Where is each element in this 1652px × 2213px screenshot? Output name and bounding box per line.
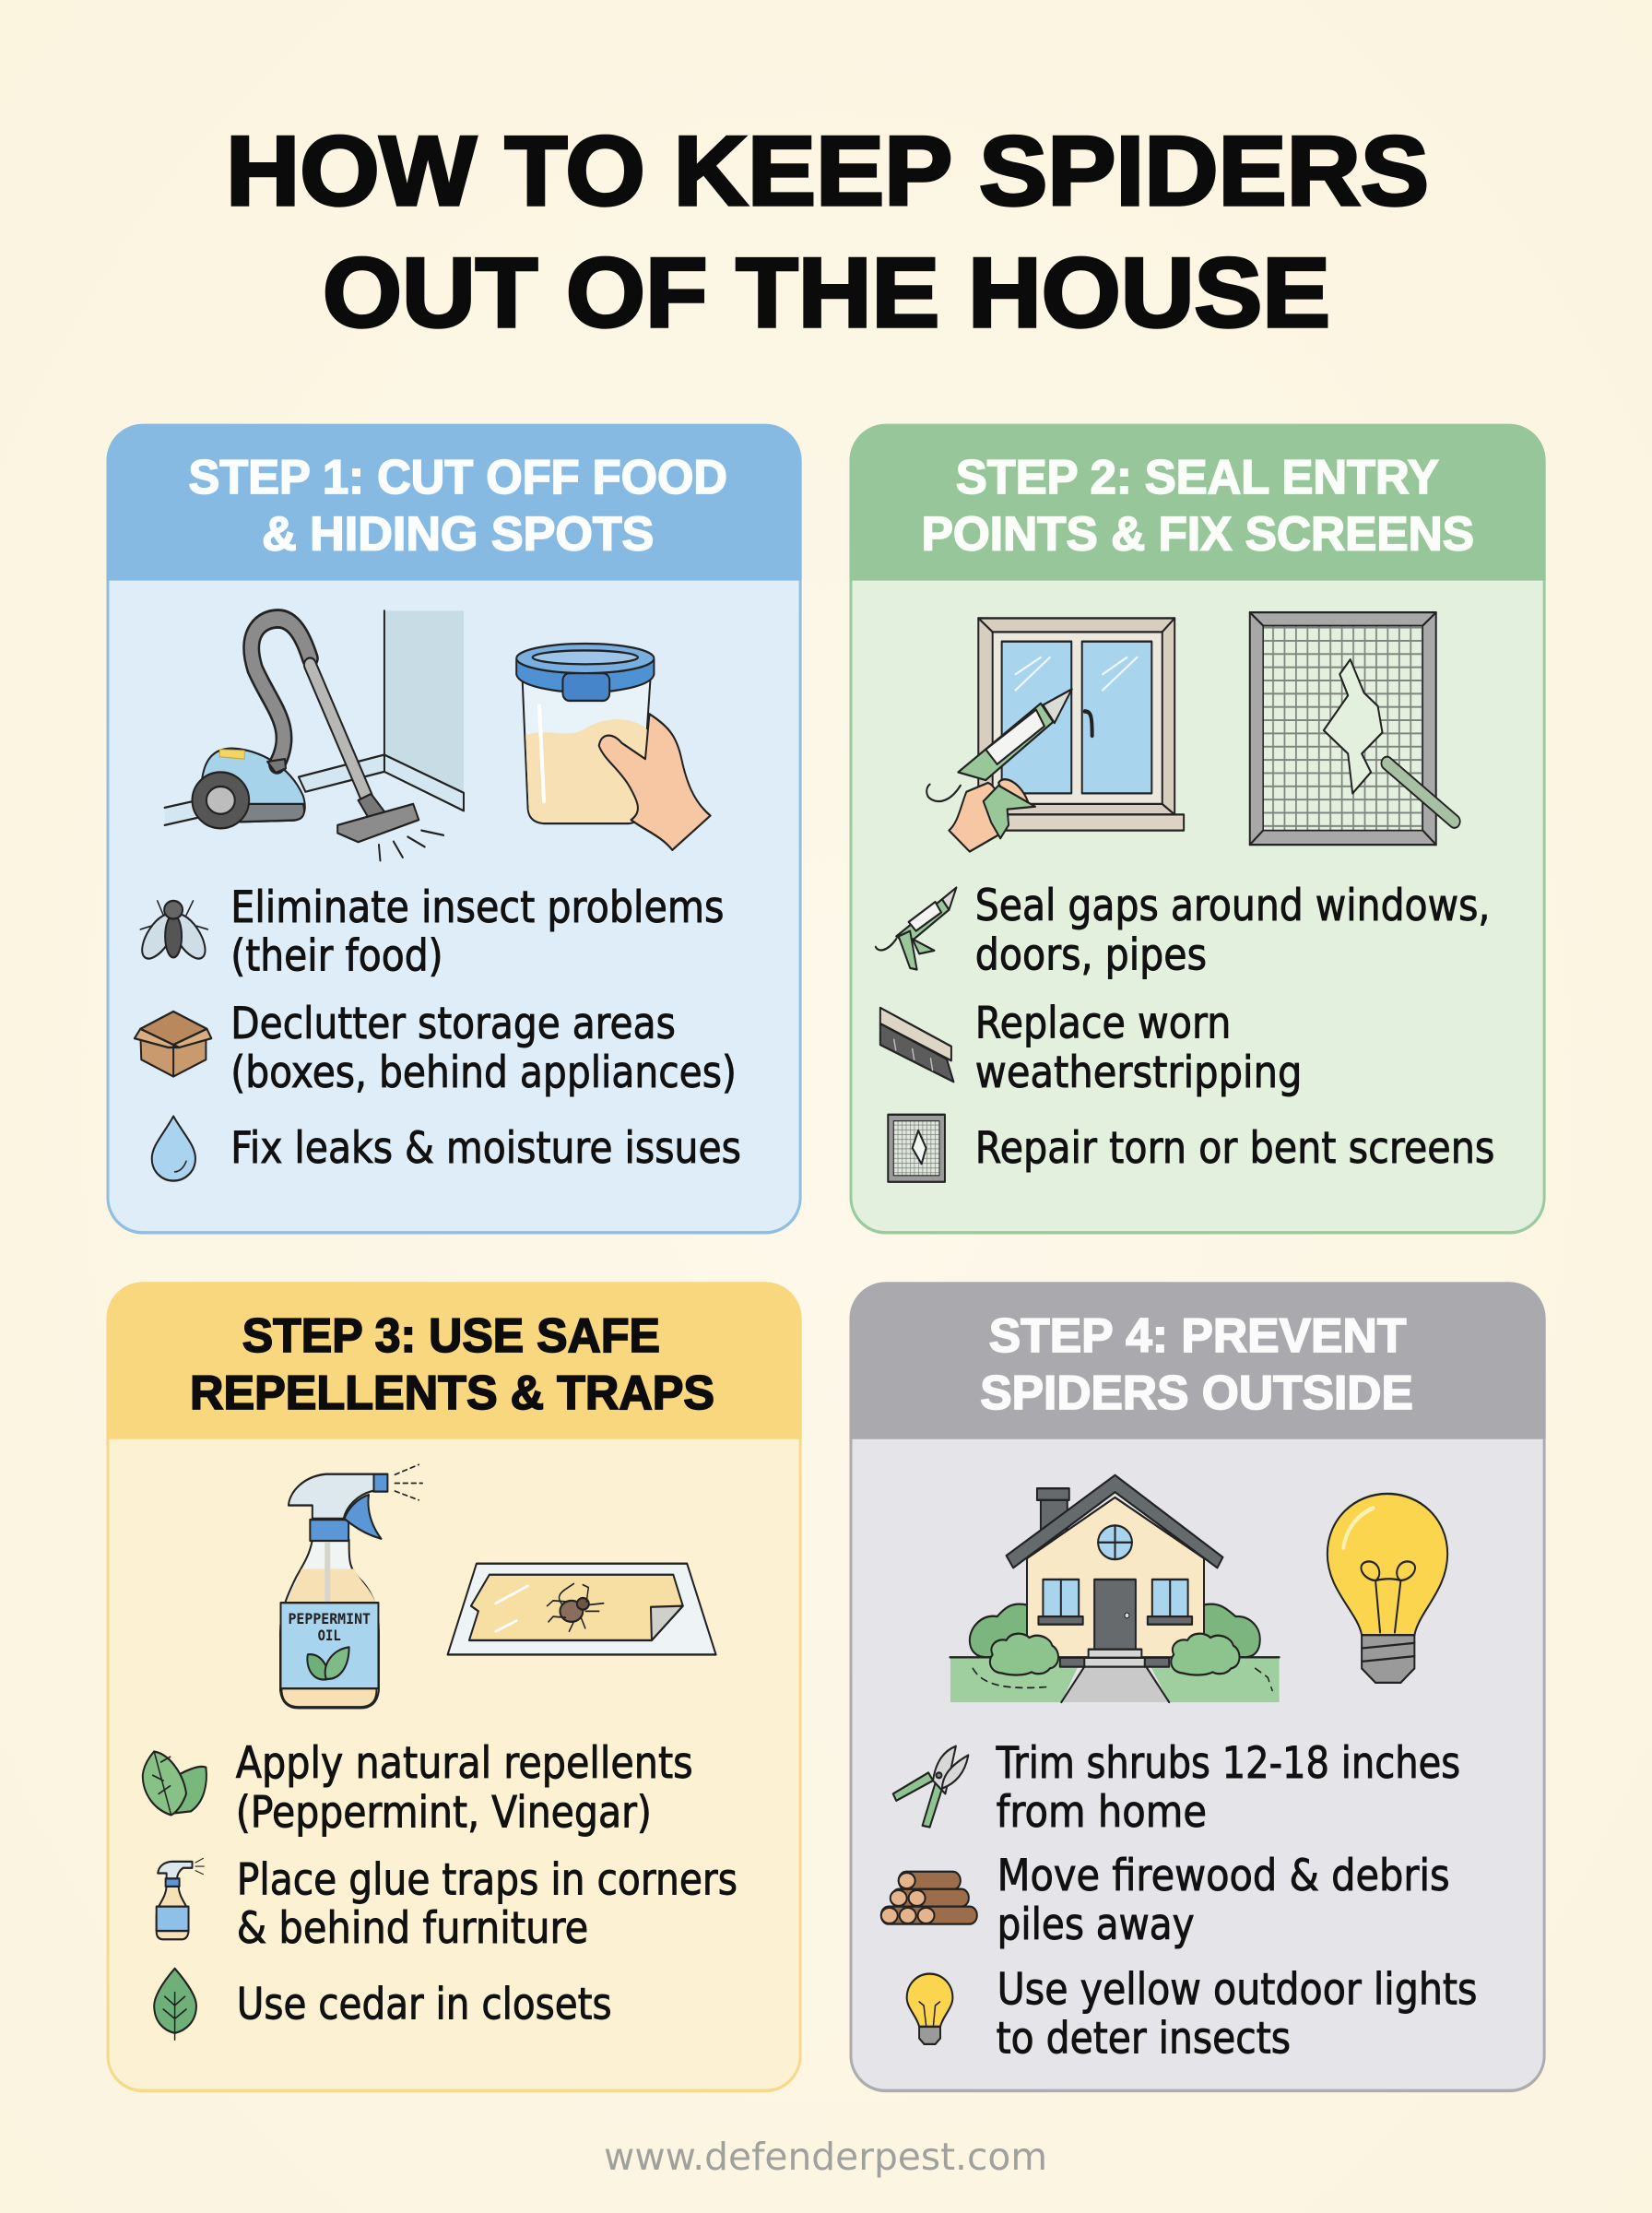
- bullet list: (Peppermint, Vinegar): [236, 1788, 652, 1838]
- illustration: house with shrubs: [950, 1475, 1280, 1702]
- bullet list: [135, 882, 741, 1181]
- bullet list: (their food): [230, 931, 443, 981]
- bullet list: Seal gaps around windows,: [975, 881, 1490, 931]
- icon: weatherstripping brush: [880, 1008, 953, 1082]
- step 2 heading: [849, 424, 1546, 581]
- illustration: vacuum in room corner: [165, 610, 464, 860]
- panel: step 3: [106, 1282, 802, 2090]
- bullet list: Place glue traps in corners: [237, 1855, 738, 1905]
- bullet list: [881, 1738, 1478, 2064]
- bullet list: Apply natural repellents: [236, 1738, 693, 1789]
- bullet list: [143, 1738, 738, 2040]
- step 4 heading: [849, 1282, 1546, 1439]
- icon: small torn screen: [888, 1115, 945, 1182]
- step 1 heading: [106, 424, 802, 581]
- bullet list: & behind furniture: [237, 1904, 588, 1954]
- icon: caulk gun: [876, 888, 956, 970]
- step 3 heading: REPELLENTS & TRAPS: [190, 1367, 714, 1420]
- step 3 heading: [106, 1282, 802, 1439]
- icon: mint leaves: [143, 1751, 206, 1815]
- icon: pruners: [893, 1746, 968, 1828]
- icon: cedar leaf: [154, 1969, 196, 2040]
- illustration: peppermint oil spray bottle: OIL: [318, 1627, 341, 1644]
- bullet list: Declutter storage areas: [230, 999, 676, 1049]
- illustration: glue trap with spider: [448, 1564, 716, 1654]
- panel: step 1: [106, 424, 802, 1233]
- title: OUT OF THE HOUSE: [323, 237, 1330, 348]
- bullet list: (boxes, behind appliances): [230, 1047, 737, 1098]
- step 4 heading: SPIDERS OUTSIDE: [980, 1367, 1413, 1420]
- icon: firewood pile: [881, 1872, 977, 1924]
- panel: step 4: [849, 1282, 1546, 2090]
- bullet list: Replace worn: [975, 999, 1231, 1048]
- icon: small bulb: [907, 1974, 952, 2044]
- bullet list: Repair torn or bent screens: [975, 1123, 1494, 1174]
- bullet list: Use yellow outdoor lights: [997, 1965, 1478, 2015]
- bullet list: Move firewood & debris: [997, 1851, 1450, 1901]
- illustration: peppermint oil spray bottle: PEPPERMINT: [288, 1610, 371, 1627]
- title: HOW TO KEEP SPIDERS: [226, 115, 1429, 226]
- illustration: window and caulk gun: [926, 618, 1184, 852]
- step 1 heading: STEP 1: CUT OFF FOOD: [189, 451, 727, 504]
- step 2 heading: STEP 2: SEAL ENTRY: [956, 451, 1439, 504]
- bullet list: from home: [997, 1787, 1207, 1838]
- step 3 heading: STEP 3: USE SAFE: [242, 1309, 660, 1363]
- icon: fly: [136, 901, 211, 964]
- panel: step 2: [849, 424, 1546, 1233]
- bullet list: piles away: [997, 1899, 1195, 1950]
- icon: small spray bottle: [157, 1858, 204, 1939]
- step 4 heading: STEP 4: PREVENT: [989, 1309, 1407, 1363]
- bullet list: Fix leaks & moisture issues: [230, 1123, 741, 1174]
- icon: box: [135, 1012, 211, 1077]
- bullet list: Use cedar in closets: [237, 1980, 612, 2030]
- footer: website: www.defenderpest.com: [604, 2135, 1047, 2179]
- bullet list: to deter insects: [997, 2014, 1291, 2064]
- icon: water drop: [152, 1117, 195, 1181]
- illustration: peppermint oil spray bottle: [280, 1464, 422, 1708]
- bullet list: doors, pipes: [975, 930, 1207, 980]
- step 1 heading: & HIDING SPOTS: [262, 507, 654, 561]
- illustration: yellow light bulb: [1328, 1494, 1447, 1683]
- bullet list: Eliminate insect problems: [230, 882, 725, 933]
- step 2 heading: POINTS & FIX SCREENS: [922, 507, 1474, 561]
- bullet list: weatherstripping: [975, 1047, 1302, 1098]
- illustration: sealed food container: [516, 644, 711, 850]
- title: [226, 115, 1429, 348]
- bullet list: Trim shrubs 12-18 inches: [996, 1738, 1460, 1789]
- illustration: torn screen and repair tool: [1250, 612, 1455, 845]
- bullet list: [876, 881, 1494, 1182]
